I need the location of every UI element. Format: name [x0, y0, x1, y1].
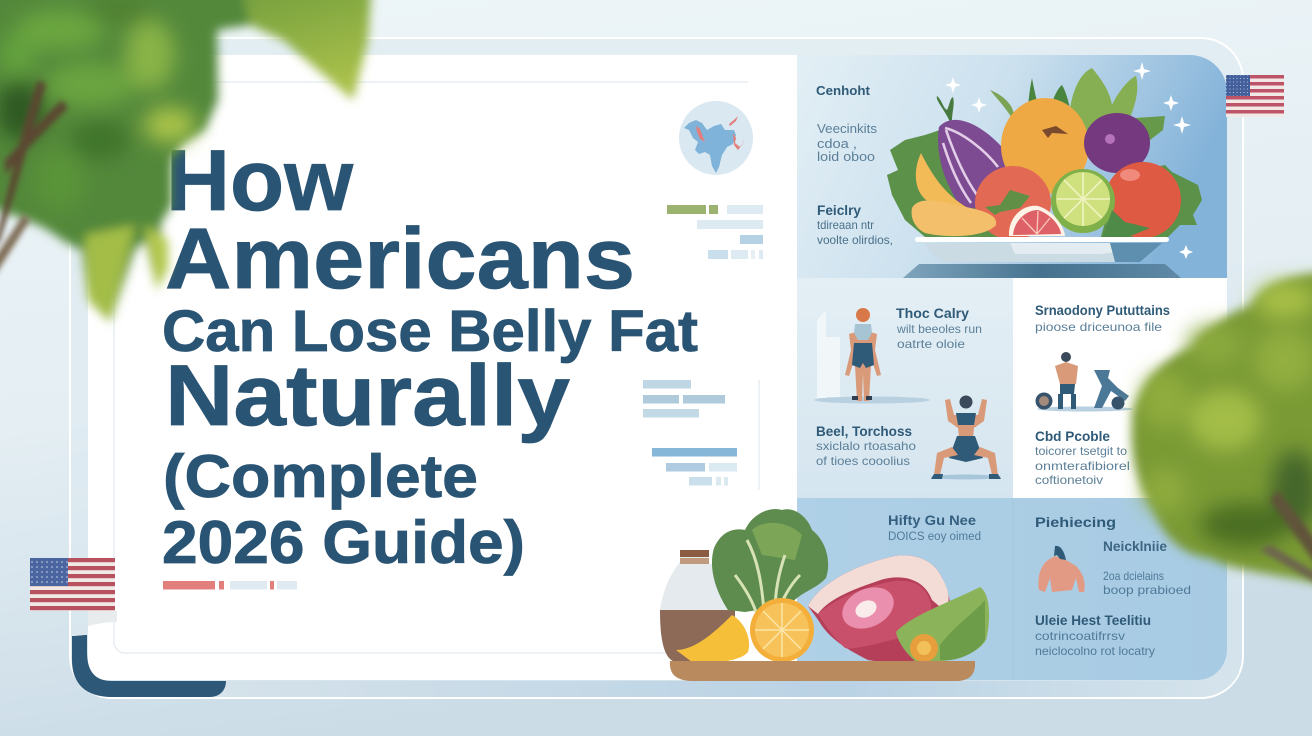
- sparkles: [945, 62, 1193, 259]
- green squash: [896, 587, 989, 662]
- title: Can Lose Belly Fat: [162, 299, 698, 364]
- title: 2026 Guide): [162, 509, 525, 576]
- decoration: tree bottom right: [1131, 271, 1312, 590]
- text: neicklniie: 2oa dcielains: [1103, 569, 1164, 583]
- illustration: gym equipment: [1036, 352, 1133, 412]
- panel: equipment: [1013, 278, 1227, 498]
- accent bar under title: [163, 581, 297, 590]
- text: beel torchoss: Beel, Torchoss: [816, 423, 912, 439]
- text: neicklniie: boop prabioed: [1103, 583, 1191, 597]
- text: beel torchoss: sxiclalo rtoasaho: [816, 439, 916, 453]
- plum: [1084, 113, 1150, 173]
- greens behind: [887, 78, 1202, 240]
- text: feichy notes: tdireaan ntr: [817, 218, 874, 232]
- text: neicklniie: [1103, 539, 1191, 597]
- panel: standing figure: [797, 278, 1013, 498]
- chart bars: upper right: [667, 205, 763, 259]
- text: thoc calry: Thoc Calry: [896, 305, 969, 321]
- text: vegetable notes: loid oboo: [817, 150, 875, 164]
- plate: [925, 243, 1162, 262]
- tomato left: [975, 166, 1051, 240]
- grey paper tab under flag: [88, 611, 117, 626]
- text: cbd pcoble: coftionetoiv: [1035, 473, 1103, 487]
- text: cbd pcoble: [1035, 428, 1130, 487]
- text: cbd pcoble: toicorer tsetgit to: [1035, 444, 1127, 458]
- text: hifty gu nee: Hifty Gu Nee: [888, 513, 977, 528]
- text: feichy notes: voolte olirdios,: [817, 233, 893, 247]
- text: hifty gu nee: DOICS eoy oimed: [888, 531, 981, 543]
- text: uleie hest teelitiu: Uleie Hest Teelitiu: [1035, 612, 1151, 628]
- chart bars: lower right: [643, 380, 737, 486]
- text: standing figure notes: [896, 322, 982, 351]
- icon: american flag right: [1226, 75, 1284, 117]
- text: standing figure notes: wilt beeoles run: [896, 322, 982, 336]
- title: [162, 133, 698, 576]
- text: uleie hest teelitiu: neiclocolno rot locatry: [1035, 644, 1155, 658]
- panel: vegetable plate: [797, 55, 1227, 278]
- orange squash: [1001, 98, 1089, 194]
- illustration: squatting woman: [931, 396, 1001, 480]
- text: cbd pcoble: onmterafibiorel: [1035, 459, 1130, 473]
- plate stand: [903, 264, 1181, 278]
- title: Naturally: [165, 348, 570, 444]
- text: beel torchoss: of tioes cooolius: [816, 454, 910, 468]
- text: panel heading one: Cenhoht: [816, 83, 871, 98]
- icon: globe: [679, 101, 753, 175]
- lime: [1051, 169, 1115, 233]
- text: vegetable notes: cdoa ,: [817, 137, 857, 151]
- text: uleie hest teelitiu: [1035, 612, 1155, 658]
- title: Americans: [165, 211, 635, 307]
- herbs front: [1103, 210, 1150, 237]
- text: cbd pcoble: Cbd Pcoble: [1035, 428, 1110, 444]
- icon: american flag left: [30, 558, 115, 611]
- text: equipment note: pioose driceunoa file: [1035, 320, 1162, 334]
- illustration: standing woman: [814, 308, 930, 404]
- text: vegetable notes: [817, 122, 877, 164]
- icon: stretching figure: [1038, 546, 1085, 592]
- text: smaodony pututtains: Srnaodony Pututtains: [1035, 302, 1170, 318]
- title: (Complete: [163, 443, 478, 510]
- main white card: [88, 55, 1227, 680]
- text: standing figure notes: oatrte oloie: [897, 337, 965, 351]
- title: How: [166, 133, 354, 229]
- wooden board: [670, 661, 975, 681]
- text: feichy notes: Feiclry: [817, 202, 861, 218]
- leafy greens: [712, 509, 828, 612]
- text: piehiecing: Piehiecing: [1035, 515, 1116, 530]
- orange slice: [750, 598, 814, 662]
- grapefruit: [1009, 206, 1065, 236]
- lemon wedge: [676, 615, 749, 663]
- text: feichy notes: [817, 202, 893, 247]
- meat: [808, 555, 953, 662]
- illustration: vegetable plate: [887, 62, 1202, 278]
- bottom band: [226, 665, 1239, 697]
- jar: [660, 552, 735, 662]
- banana: [916, 153, 968, 209]
- eggplant: [938, 120, 1014, 209]
- panel: bottom blue: [797, 498, 1227, 680]
- tomato right: [1105, 162, 1181, 238]
- text: hifty gu nee: [888, 513, 981, 543]
- text: uleie hest teelitiu: cotrincoatifrrsv: [1035, 629, 1125, 643]
- dark corner bracket: [72, 635, 226, 697]
- illustration: food board: [660, 509, 989, 681]
- text: neicklniie: Neicklniie: [1103, 539, 1167, 554]
- decoration: tree top left: [0, 0, 372, 322]
- text: beel torchoss: [816, 423, 916, 468]
- inner title frame line: [114, 82, 759, 653]
- text: vegetable notes: Veecinkits: [817, 122, 877, 136]
